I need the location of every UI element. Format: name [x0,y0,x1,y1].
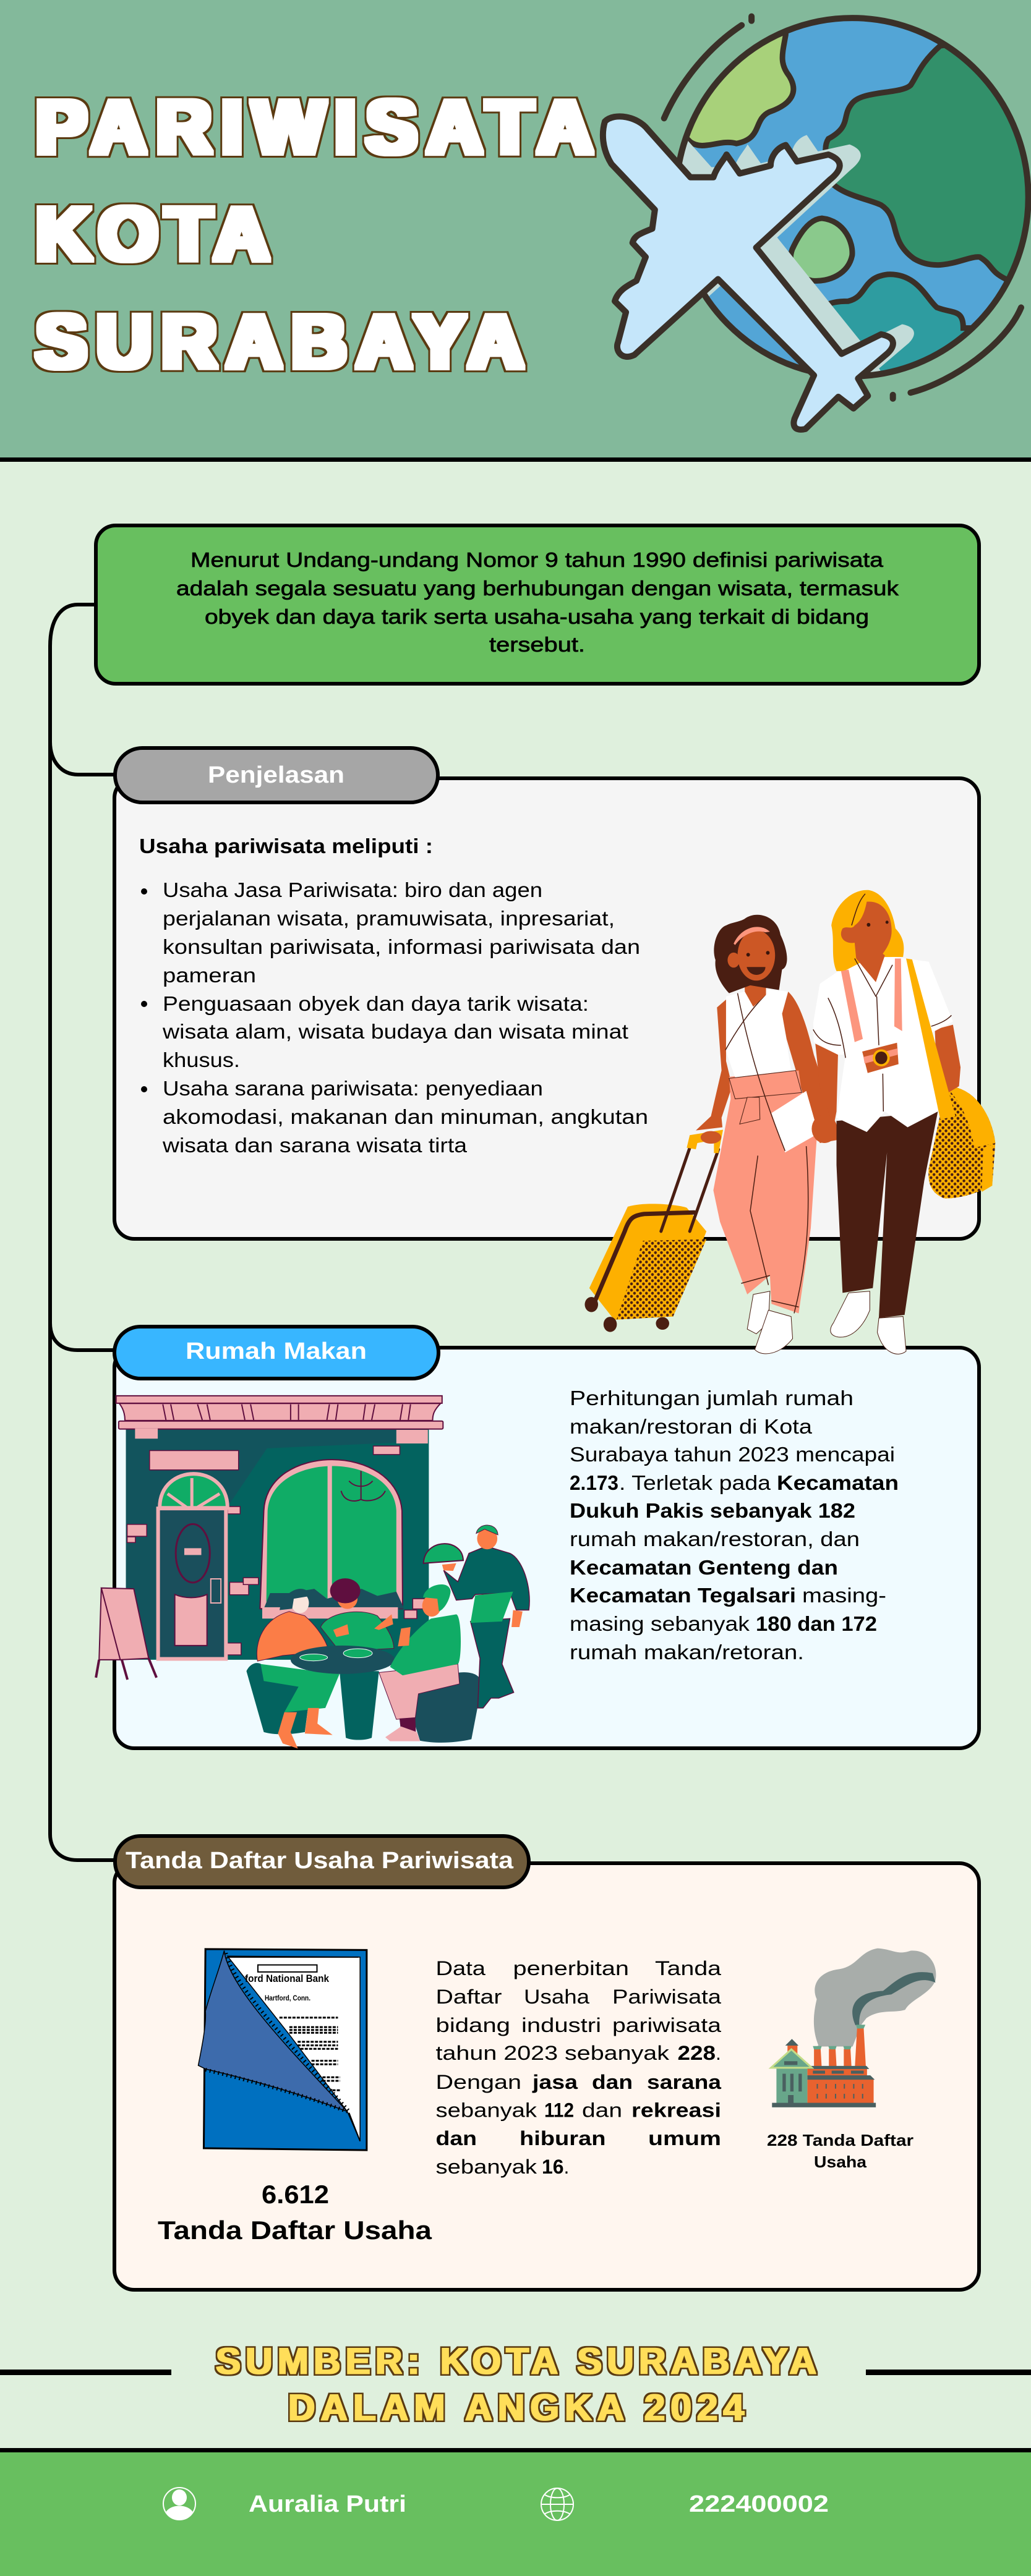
paragraph: Usaha [524,1986,589,2008]
stat: 228 Tanda Daftar Usaha: 228 Tanda Daftar [767,2131,913,2149]
document page text: ford National Bank [245,1973,329,1984]
paragraph: Tanda [655,1957,721,1979]
panel: Rumah Makan: masing sebanyak [570,1612,750,1635]
paragraph: jasa [532,2071,578,2093]
panel: Penjelasan: perjalanan wisata, pramuwisata, inpresariat, [163,907,615,930]
source credit [0,2340,1031,2428]
panel: Penjelasan: pameran [163,964,256,987]
stat: 228 Tanda Daftar Usaha [767,2131,913,2171]
wall bricks and sign [127,1429,429,1655]
icon: globe and airplane [603,17,1031,430]
stools and table [246,1663,482,1743]
panel: introduction: obyek dan daya tarik serta usaha-usaha yang terkait di bidang [205,605,869,628]
panel: Penjelasan: khusus. [163,1048,240,1071]
man [813,890,995,1354]
paragraph [435,1957,721,2178]
airplane [603,116,893,430]
paragraph: . [716,2042,721,2064]
stat: 6.612 Tanda Daftar Usaha [158,2180,432,2245]
paragraph: dan [582,2099,622,2122]
paragraph: 112 [544,2099,574,2122]
panel: Rumah Makan: Kecamatan Genteng dan [570,1556,838,1579]
diners [257,1578,461,1749]
panel: Penjelasan: Penguasaan obyek dan daya tarik wisata: [163,992,589,1015]
cornice [116,1396,443,1429]
panel: Rumah Makan: masing- [802,1584,886,1607]
panel: Rumah Makan: Surabaya tahun 2023 mencapai [570,1443,895,1466]
paragraph: Data [435,1957,486,1979]
heading: Penjelasan [115,748,438,802]
panel: Penjelasan: Usaha pariwisata meliputi : [139,835,433,857]
source credit: DALAM ANGKA 2024 [288,2387,745,2428]
panel: Rumah Makan: Perhitungan jumlah rumah [570,1387,853,1409]
title: PARIWISATA [36,85,593,170]
paragraph: penerbitan [513,1957,629,1979]
door [158,1474,228,1659]
paragraph: sarana [647,2071,721,2093]
title: KOTA [36,192,269,277]
panel: Rumah Makan: 180 dan 172 [756,1612,877,1635]
woman [696,915,838,1354]
stat: 6.612 Tanda Daftar Usaha: 6.612 [262,2180,329,2209]
footer: Auralia Putri [249,2491,406,2517]
panel: Rumah Makan: rumah makan/retoran. [570,1641,804,1664]
panel: Rumah Makan: 2.173 [570,1471,618,1494]
heading: Penjelasan: Penjelasan [208,762,344,788]
paragraph: rekreasi [631,2099,721,2122]
panel: Penjelasan: wisata dan sarana wisata tirta [162,1134,468,1157]
panel: Penjelasan: konsultan pariwisata, informasi pariwisata dan [163,935,640,958]
A-frame sign [96,1588,156,1680]
illustration: travellers [584,890,995,1354]
waiter [424,1525,529,1708]
heading: Rumah Makan: Rumah Makan [186,1338,367,1364]
panel: Rumah Makan: Dukuh Pakis sebanyak 182 [570,1499,855,1522]
paragraph: 16 [542,2156,564,2178]
panel: Penjelasan: Usaha sarana pariwisata: penyediaan [163,1077,543,1100]
panel: introduction: tersebut. [489,633,585,656]
document page text: Hartford, Conn. [265,1994,310,2002]
globe [682,21,1025,372]
paragraph: Daftar [435,1986,502,2008]
document page text [245,1973,329,2002]
paragraph: dan [435,2127,477,2149]
paragraph: umum [648,2127,721,2149]
panel: introduction [96,525,979,684]
title: SURABAYA [36,300,523,385]
paragraph: tahun 2023 sebanyak [435,2042,670,2064]
paragraph: hiburan [520,2127,606,2149]
source credit: SUMBER: KOTA SURABAYA [216,2340,816,2382]
paragraph: bidang [435,2014,510,2036]
icon: factory [771,1949,936,2107]
building wall [126,1427,429,1660]
heading: Rumah Makan [114,1327,438,1379]
panel: Rumah Makan: rumah makan/restoran, dan [570,1528,860,1550]
stat: 228 Tanda Daftar Usaha: Usaha [814,2153,867,2171]
window [260,1460,404,1618]
paragraph: sebanyak [435,2099,537,2122]
footer [0,2448,1031,2576]
paragraph: 228 [678,2042,716,2064]
paragraph: . [564,2156,569,2178]
icon: person [163,2488,195,2520]
paragraph: pariwisata [612,2014,721,2036]
panel: Penjelasan: Usaha Jasa Pariwisata: biro dan agen [163,878,542,901]
illustration: restaurant [96,1396,529,1749]
connector lines [50,605,118,1860]
paragraph: dan [592,2071,633,2093]
panel: Rumah Makan: Kecamatan Tegalsari [570,1584,796,1607]
orbit dashes [664,17,1021,399]
panel: Penjelasan [114,778,979,1239]
title [36,85,593,385]
panel: Rumah Makan [114,1348,979,1748]
panel: Rumah Makan: Kecamatan [777,1471,899,1494]
paragraph: Dengan [435,2071,521,2093]
paragraph: industri [521,2014,601,2036]
panel: introduction: adalah segala sesuatu yang berhubungan dengan wisata, termasuk [176,577,899,600]
panel: Rumah Makan: . Terletak pada [619,1471,771,1494]
suitcase [584,1130,723,1332]
icon: globe [541,2488,573,2520]
stat: 6.612 Tanda Daftar Usaha: Tanda Daftar Usaha [158,2216,432,2245]
panel: Penjelasan: wisata alam, wisata budaya dan wisata minat [162,1020,628,1043]
panel: Tanda Daftar Usaha Pariwisata [114,1863,979,2290]
paragraph: Pariwisata [612,1986,721,2008]
paragraph: sebanyak [435,2156,537,2178]
panel: Rumah Makan: makan/restoran di Kota [570,1415,813,1438]
header banner [0,0,1031,462]
heading: Tanda Daftar Usaha Pariwisata: Tanda Daftar Usaha Pariwisata [126,1848,514,1874]
icon: document [199,1949,367,2150]
panel: introduction: Menurut Undang-undang Nomor 9 tahun 1990 definisi pariwisata [190,548,884,571]
heading: Tanda Daftar Usaha Pariwisata [115,1836,529,1887]
footer: 222400002 [689,2491,829,2517]
panel: Penjelasan: akomodasi, makanan dan minuman, angkutan [163,1105,648,1128]
